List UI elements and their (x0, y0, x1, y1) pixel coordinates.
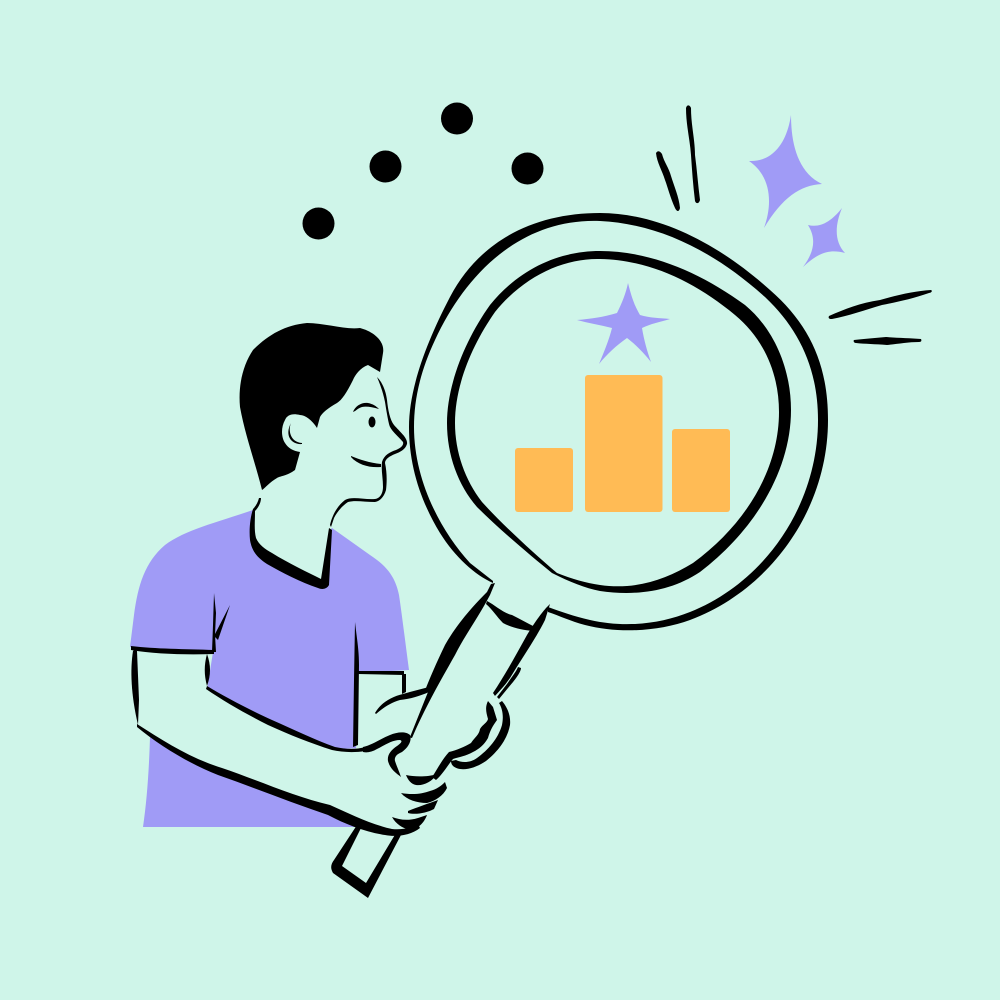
front fingers (406, 774, 437, 785)
handle right edge (493, 604, 550, 696)
icon: large sparkle (749, 115, 822, 228)
handle left edge (408, 583, 495, 738)
left arm (137, 650, 445, 832)
back thumb (497, 667, 521, 699)
podium bar left (515, 448, 573, 512)
handle end (331, 825, 401, 898)
forearm grip fold (375, 686, 432, 714)
collar line (250, 498, 332, 589)
upper forearm line (206, 686, 366, 752)
thumb (363, 732, 411, 777)
face profile (330, 377, 407, 527)
eyebrow (353, 403, 379, 412)
person (131, 323, 521, 836)
podium star (577, 283, 670, 364)
lower forearm line (137, 724, 420, 836)
handle collar (486, 601, 535, 631)
inner lens ring (447, 251, 791, 593)
icon: small sparkle (803, 208, 845, 267)
inner ear (288, 423, 302, 444)
hair (240, 323, 383, 490)
back hand (433, 668, 520, 777)
smile (351, 456, 381, 467)
handle body (332, 583, 548, 897)
outer lens ring (409, 213, 828, 630)
right arm (356, 673, 430, 750)
eye (368, 416, 376, 428)
magnifying glass (331, 213, 828, 898)
sleeve hems (131, 646, 214, 654)
back hand outline (451, 701, 510, 769)
shirt (130, 510, 409, 827)
emphasis strokes (656, 105, 932, 345)
podium bar centre (585, 375, 662, 512)
podium bar right (672, 429, 730, 512)
floating dots (302, 102, 544, 240)
back fingers (432, 701, 497, 780)
lens contents (515, 283, 730, 512)
sleeve and body lines (212, 593, 216, 652)
neck and face skin (250, 365, 407, 587)
